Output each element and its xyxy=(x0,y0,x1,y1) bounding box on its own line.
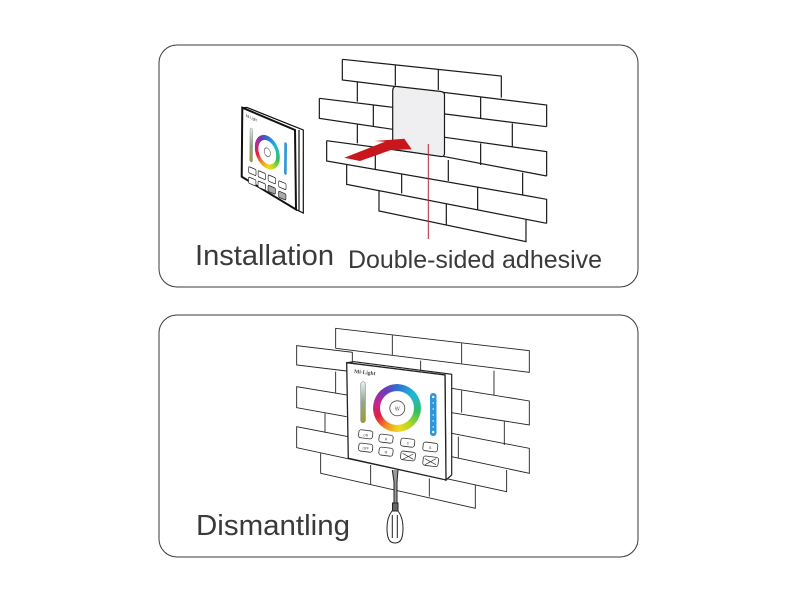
panel side xyxy=(347,362,452,480)
speed bar xyxy=(430,393,436,436)
button labels: M xyxy=(385,450,388,454)
button labels: OFF xyxy=(363,446,369,450)
label: Double-sided adhesive: Double-sided adhesive xyxy=(348,246,602,274)
icon: small remote panel xyxy=(242,108,303,213)
panel: dismantling xyxy=(159,315,638,557)
panel side xyxy=(242,108,303,213)
panel controls: Mi·Light xyxy=(246,114,258,123)
button labels: R xyxy=(385,438,388,442)
brightness slider xyxy=(361,382,365,423)
button labels: S xyxy=(407,442,409,446)
panel: installation xyxy=(159,45,638,287)
panel body face xyxy=(242,108,296,210)
icon: brick wall (installation) xyxy=(319,59,547,242)
white button xyxy=(390,401,405,416)
icon: adhesive pad xyxy=(393,86,444,157)
heading: Installation: Installation xyxy=(195,240,334,272)
touch buttons xyxy=(358,429,439,467)
icon: brick wall (dismantling) xyxy=(297,328,529,508)
leader line: adhesive xyxy=(427,144,429,239)
speed dots xyxy=(432,396,434,433)
brand text: Mi·Light xyxy=(354,369,376,377)
icon: large remote panel xyxy=(347,362,452,480)
heading: Dismantling: Dismantling xyxy=(196,510,350,542)
arrow: red push arrow xyxy=(344,139,412,161)
panel face xyxy=(347,363,446,480)
panel controls xyxy=(245,114,287,200)
button labels: ON xyxy=(363,434,369,438)
W label: W xyxy=(395,406,400,412)
button labels: B xyxy=(429,446,431,450)
icon: screwdriver xyxy=(387,470,403,543)
button labels xyxy=(363,434,431,454)
colour ring xyxy=(373,384,421,432)
